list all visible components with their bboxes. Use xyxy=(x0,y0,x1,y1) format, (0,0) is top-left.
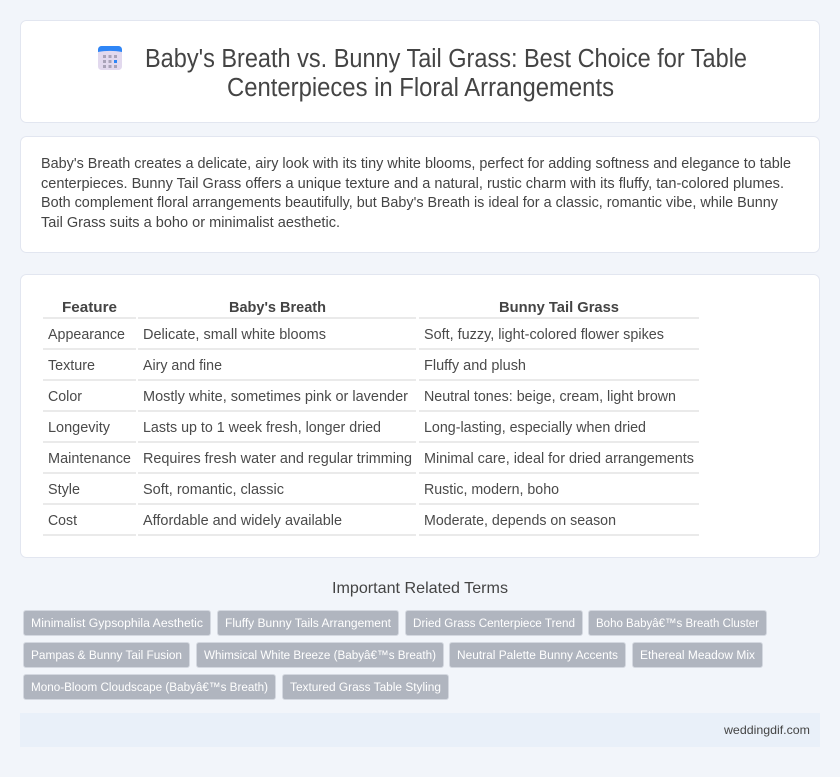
heading: important related terms: Important Related Terms xyxy=(332,580,508,597)
tag xyxy=(24,674,276,700)
title: Centerpieces in Floral Arrangements xyxy=(227,74,614,102)
tag xyxy=(24,642,190,668)
tag xyxy=(218,610,398,636)
tag xyxy=(632,642,762,668)
tag: Neutral Palette Bunny Accents xyxy=(457,648,618,662)
table row: cost: Cost xyxy=(48,513,77,529)
table row: maintenance: Minimal care, ideal for dried arrangements xyxy=(424,451,694,467)
table row: texture: Airy and fine xyxy=(143,358,222,374)
tag xyxy=(282,674,448,700)
table row: longevity xyxy=(48,420,646,436)
tag: Dried Grass Centerpiece Trend xyxy=(413,616,575,630)
table row: maintenance: Maintenance xyxy=(48,451,131,467)
table row: maintenance xyxy=(48,451,694,467)
table row: longevity: Lasts up to 1 week fresh, longer dried xyxy=(143,420,381,436)
table row: maintenance: Requires fresh water and regular trimming xyxy=(143,451,412,467)
table row: longevity: Longevity xyxy=(48,420,111,436)
table header: Baby's Breath xyxy=(229,299,326,316)
table header: Feature xyxy=(62,299,117,316)
table row: style: Soft, romantic, classic xyxy=(143,482,284,498)
table row: color: Neutral tones: beige, cream, light brown xyxy=(424,389,676,405)
table row: texture xyxy=(48,358,526,374)
tag group: related terms xyxy=(24,610,766,700)
table row: color: Mostly white, sometimes pink or lavender xyxy=(143,389,408,405)
text block: introduction: Both complement floral arrangements beautifully, but Baby's Breath is ideal for a classic, romantic vibe, while Bunny xyxy=(41,195,779,211)
table row: style xyxy=(48,482,559,498)
tag: Textured Grass Table Styling xyxy=(290,680,441,694)
tag xyxy=(588,610,766,636)
table row: longevity: Long-lasting, especially when dried xyxy=(424,420,646,436)
tag xyxy=(406,610,582,636)
footer bar xyxy=(20,713,820,747)
tag: Ethereal Meadow Mix xyxy=(640,648,756,662)
table row: cost: Affordable and widely available xyxy=(143,513,342,529)
title: Baby's Breath vs. Bunny Tail Grass: Best Choice for Table xyxy=(145,45,747,73)
panel: comparison table xyxy=(20,274,820,558)
table row: appearance: Soft, fuzzy, light-colored flower spikes xyxy=(424,327,664,343)
table row: appearance: Appearance xyxy=(48,327,125,343)
icon: calendar xyxy=(98,46,122,70)
tag: Mono-Bloom Cloudscape (Babyâ€™s Breath) xyxy=(31,680,268,694)
table row: color: Color xyxy=(48,389,82,405)
footer source: weddingdif.com xyxy=(723,723,810,737)
text block: introduction: centerpieces. Bunny Tail Grass offers a unique texture and a natural, rustic charm with its fluffy, tan-colored plumes. xyxy=(41,176,784,192)
tag: Minimalist Gypsophila Aesthetic xyxy=(31,616,203,630)
table row: style: Style xyxy=(48,482,80,498)
table row: color xyxy=(48,389,676,405)
table header: Bunny Tail Grass xyxy=(499,299,619,316)
tag xyxy=(24,610,210,636)
panel: title card xyxy=(20,20,820,122)
table row: appearance: Delicate, small white blooms xyxy=(143,327,326,343)
text block: introduction: Baby's Breath creates a delicate, airy look with its tiny white blooms, perfect for adding softness and elegance to table xyxy=(41,156,791,172)
tag xyxy=(196,642,444,668)
table row: appearance xyxy=(48,327,664,343)
panel: introduction xyxy=(20,136,820,252)
tag: Fluffy Bunny Tails Arrangement xyxy=(225,616,392,630)
table row: cost xyxy=(48,513,616,529)
tag: Pampas & Bunny Tail Fusion xyxy=(31,648,182,662)
table row: texture: Fluffy and plush xyxy=(424,358,526,374)
tag: Boho Babyâ€™s Breath Cluster xyxy=(596,616,759,630)
table row: cost: Moderate, depends on season xyxy=(424,513,616,529)
tag: Whimsical White Breeze (Babyâ€™s Breath) xyxy=(204,648,436,662)
text block: introduction: Tail Grass suits a boho or minimalist aesthetic. xyxy=(41,215,340,231)
table row: style: Rustic, modern, boho xyxy=(424,482,559,498)
table header xyxy=(62,299,619,316)
tag xyxy=(450,642,626,668)
table row: texture: Texture xyxy=(48,358,95,374)
